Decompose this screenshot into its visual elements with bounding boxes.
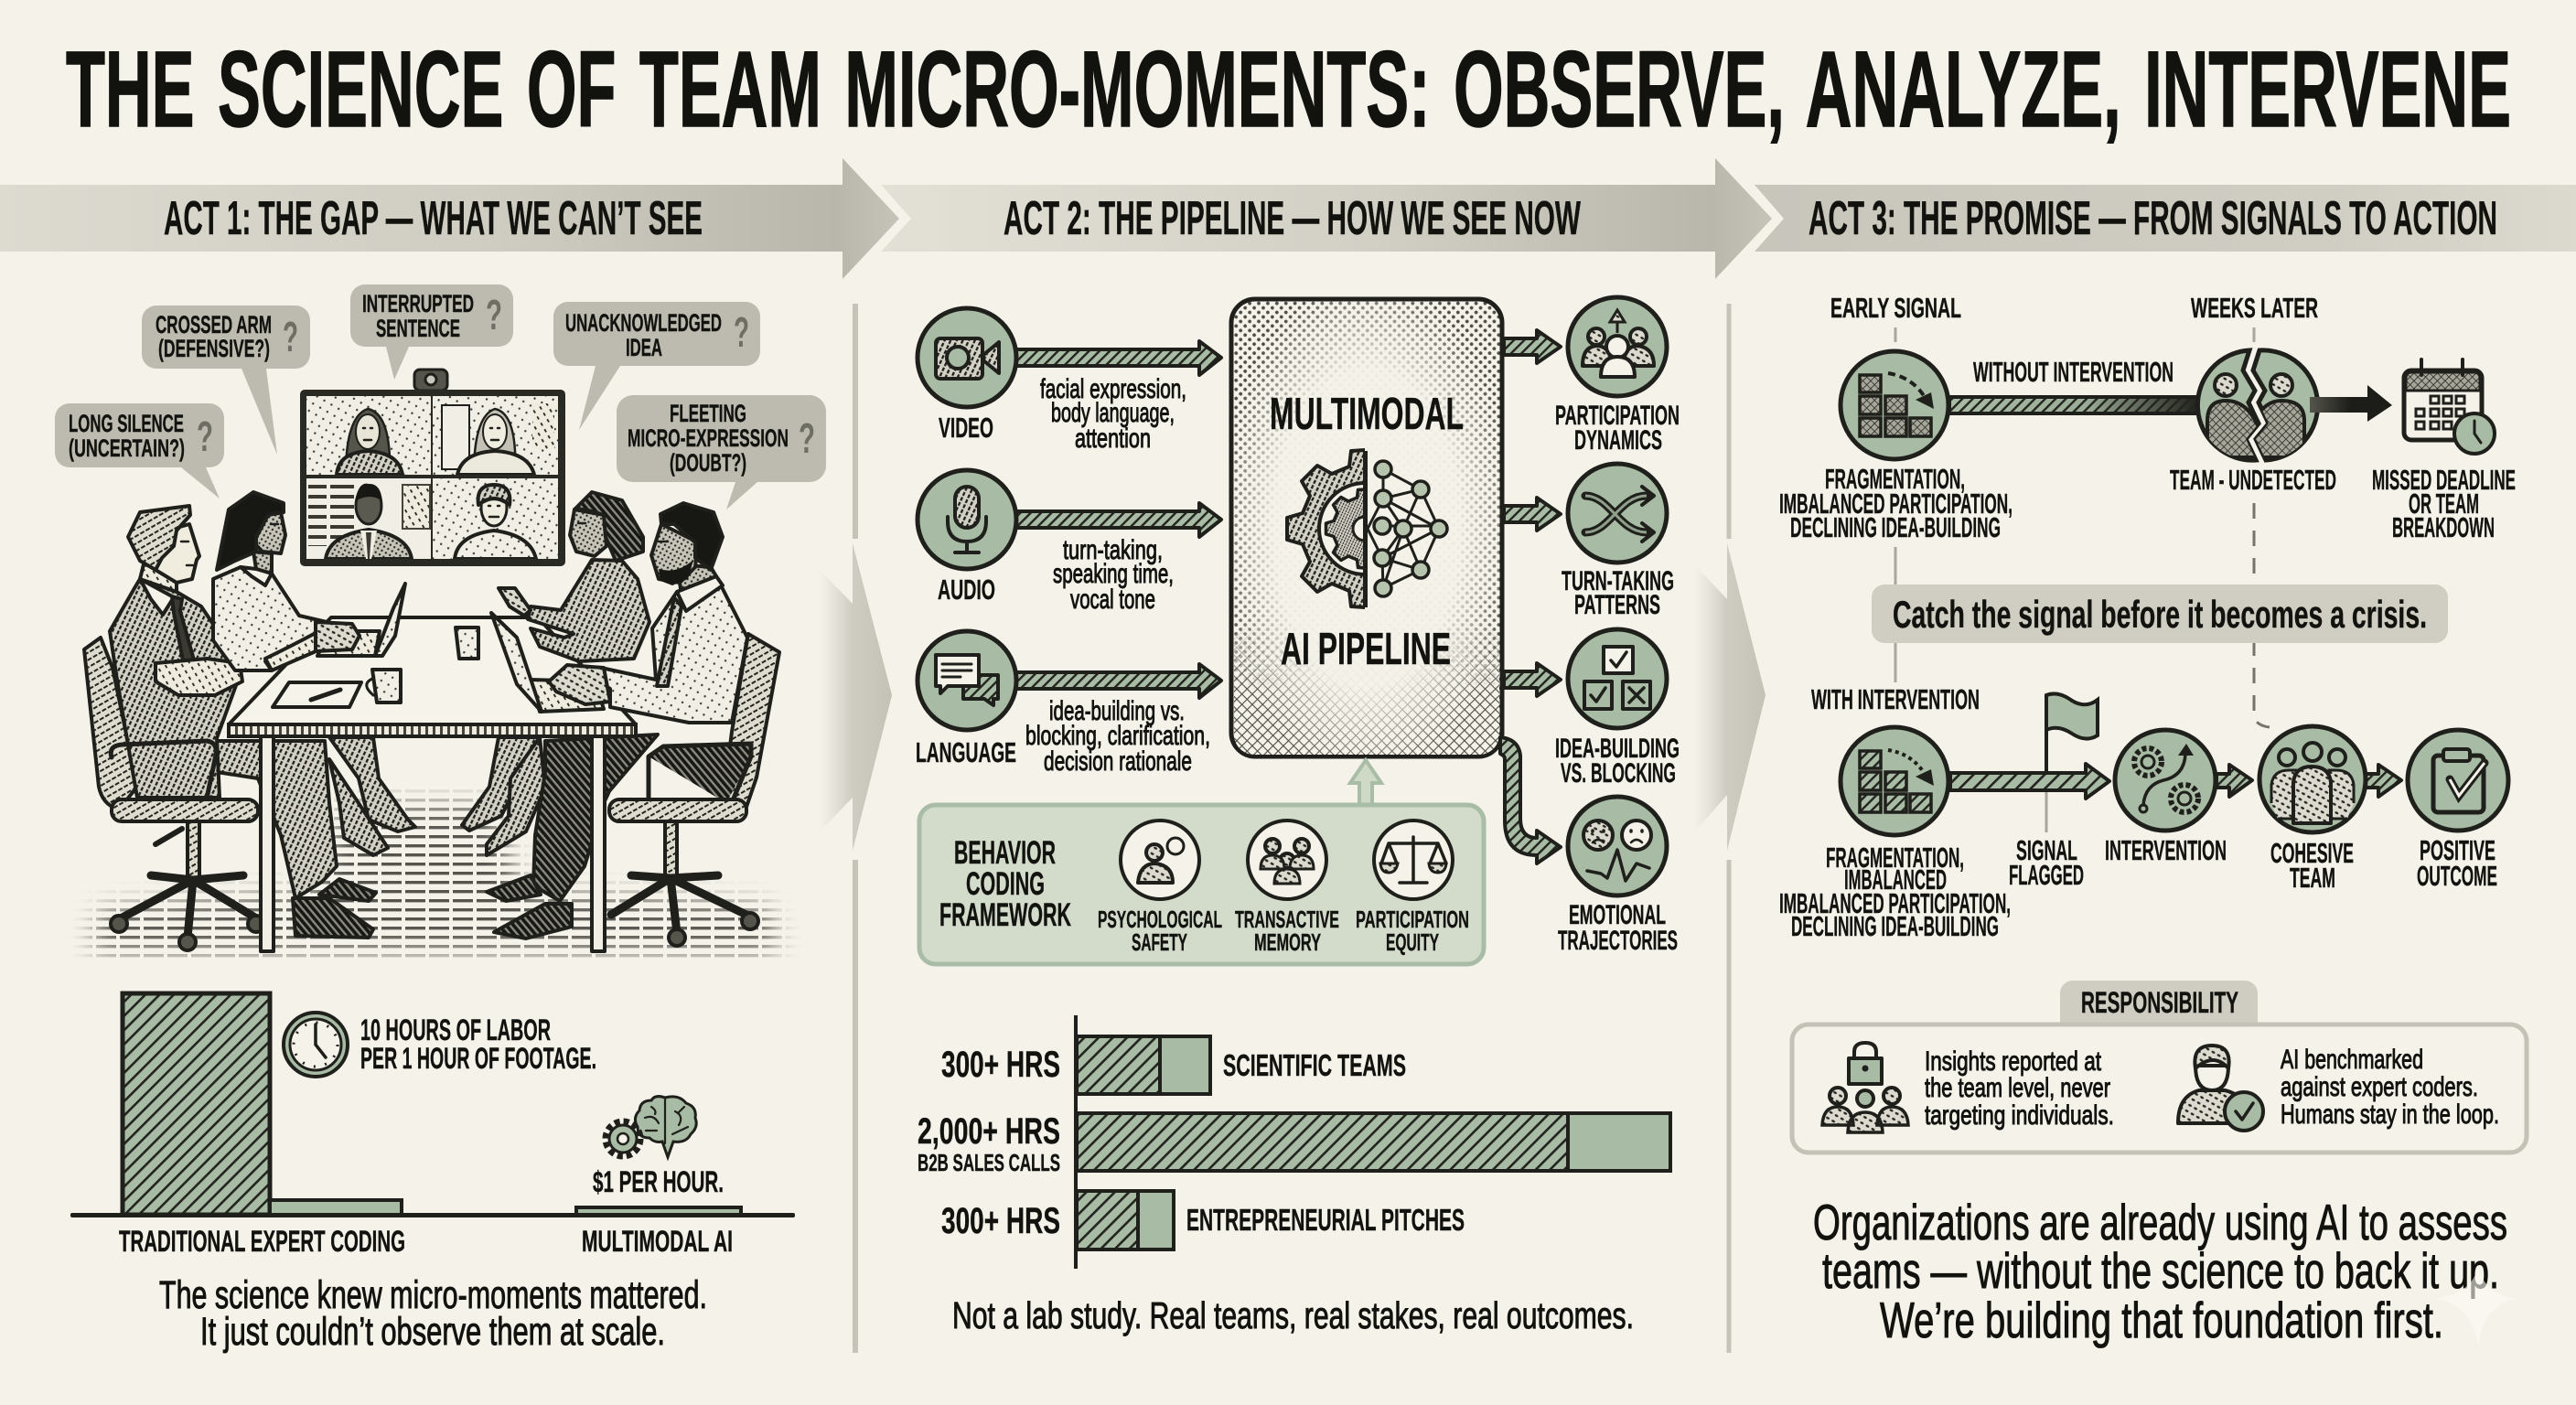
header arrow: act 1 — [0, 158, 899, 279]
speech bubble: unacknowledged idea — [553, 302, 760, 430]
multimodal AI pipeline box: AI PIPELINE — [1281, 625, 1451, 674]
icon: fragmentation blocks — [1841, 351, 1948, 459]
timeline: with intervention — [1779, 683, 2508, 942]
conference table — [229, 584, 636, 951]
floor shading — [55, 787, 814, 960]
figure: man with crossed arms — [110, 506, 258, 821]
multimodal AI pipeline box: MULTIMODAL — [1270, 390, 1464, 439]
act 1 caption: The science knew micro-moments mattered. — [159, 1273, 707, 1317]
speech bubble: fleeting micro-expression: FLEETING — [670, 400, 746, 427]
timeline: with intervention: SIGNAL — [2016, 834, 2077, 866]
panel: behavior coding framework: PARTICIPATION — [1356, 906, 1469, 933]
multimodal AI pipeline box — [1231, 299, 1502, 756]
coffee mug: far — [456, 627, 478, 659]
speech bubble: interrupted sentence: ? — [486, 291, 502, 338]
act 1 caption — [159, 1273, 707, 1354]
panel: behavior coding framework: EQUITY — [1386, 928, 1439, 956]
speech bubble: fleeting micro-expression: ? — [799, 414, 815, 462]
figure: man legs, right — [487, 735, 658, 938]
sparkle watermark — [2433, 1266, 2517, 1346]
timeline: without intervention: WEEKS LATER — [2191, 292, 2318, 324]
divider: act 2 and act 3 — [1727, 304, 1731, 1353]
header arrow: act 1: ACT 1: THE GAP — WHAT WE CAN’T SEE — [164, 192, 703, 245]
panel: act 2 the pipeline — [916, 297, 1680, 1336]
dataset bar chart — [918, 1015, 1670, 1269]
panel: act 1 the gap — [55, 284, 826, 1354]
icon: intervention gears — [2115, 730, 2216, 831]
act 1 caption: It just couldn’t observe them at scale. — [200, 1310, 665, 1354]
bar: B2B sales calls: B2B SALES CALLS — [918, 1149, 1060, 1176]
output: participation dynamics: DYNAMICS — [1574, 425, 1662, 456]
icon: positive outcome clipboard — [2408, 730, 2508, 831]
figure: woman typing on laptop — [213, 492, 360, 670]
input: language: decision rationale — [1044, 746, 1192, 777]
icon: gear and neural network — [1287, 450, 1447, 607]
speech bubble: unacknowledged idea: ? — [734, 308, 749, 356]
timeline: with intervention: IMBALANCED PARTICIPATION, — [1779, 887, 2011, 919]
notepad and pen — [273, 682, 361, 707]
remote participant: top right — [442, 403, 554, 475]
cost bar chart — [70, 993, 795, 1258]
transition chevron 2 — [1694, 543, 1766, 851]
arrow: signal to intervention — [1950, 764, 2109, 799]
panel: act 3 the promise — [1779, 292, 2527, 1348]
output: idea-building vs blocking — [1504, 629, 1680, 788]
video call monitor — [300, 370, 565, 566]
remote participant: bottom left — [308, 482, 430, 559]
bar: B2B sales calls — [918, 1111, 1670, 1176]
cost bar chart: 10 HOURS OF LABOR — [360, 1014, 551, 1046]
bar: multimodal AI — [576, 1207, 741, 1215]
cost bar chart: $1 PER HOUR. — [593, 1165, 724, 1198]
icon: checkboxes — [1584, 647, 1650, 709]
panel: behavior coding framework: SAFETY — [1132, 928, 1187, 956]
laptop: right — [491, 613, 604, 712]
input: video — [918, 308, 1221, 454]
input: audio — [918, 470, 1221, 615]
input: language — [916, 631, 1221, 777]
bar: traditional expert coding — [123, 993, 270, 1215]
arrow: breakdown — [2310, 385, 2392, 422]
input: audio: turn-taking, — [1063, 535, 1163, 565]
panel: behavior coding framework: TRANSACTIVE — [1235, 906, 1339, 933]
bar: traditional expert coding small — [270, 1200, 402, 1215]
transition chevron 1 — [819, 543, 892, 851]
speech bubble: crossed arm: CROSSED ARM — [156, 311, 272, 338]
coffee mug: near — [372, 670, 401, 702]
output: participation dynamics — [1504, 297, 1680, 456]
bar: B2B sales calls: 2,000+ HRS — [918, 1111, 1060, 1152]
timeline: with intervention: IMBALANCED — [1844, 863, 1947, 896]
timeline: with intervention: FLAGGED — [2009, 859, 2084, 891]
input: language: idea-building vs. — [1049, 696, 1185, 726]
panel: behavior coding framework: BEHAVIOR — [954, 835, 1056, 871]
speech bubble: crossed arm: (DEFENSIVE?) — [158, 335, 270, 362]
arrow: intervention to team — [2216, 765, 2252, 797]
figure: woman legs, left — [329, 737, 415, 855]
icon: scales of equity — [1374, 820, 1453, 899]
speech bubble: interrupted sentence — [350, 284, 513, 380]
right chair — [611, 634, 779, 946]
icon: group with a leading person — [1583, 310, 1654, 377]
output: emotional trajectories: TRAJECTORIES — [1558, 926, 1678, 956]
icon: transactive memory — [1248, 820, 1326, 899]
panel: responsibility: Humans stay in the loop. — [2281, 1099, 2499, 1130]
output: participation dynamics: PARTICIPATION — [1555, 401, 1680, 431]
speech bubble: crossed arm: ? — [283, 313, 298, 360]
timeline: with intervention: FRAGMENTATION, — [1826, 842, 1964, 874]
header arrow: act 2 — [881, 158, 1772, 279]
timeline: with intervention: COHESIVE — [2270, 837, 2354, 869]
output: turn-taking patterns: PATTERNS — [1574, 590, 1660, 620]
figure: woman legs, right — [462, 737, 545, 855]
timeline: without intervention: FRAGMENTATION, — [1825, 463, 1965, 495]
timeline: without intervention: DECLINING IDEA-BUILDING — [1790, 511, 2001, 543]
output: turn-taking patterns: TURN-TAKING — [1562, 566, 1674, 596]
panel: responsibility: against expert coders. — [2281, 1072, 2478, 1102]
icon: faces and pulse — [1583, 820, 1651, 881]
timeline: without intervention — [1779, 292, 2516, 543]
timeline: with intervention: OUTCOME — [2417, 860, 2497, 892]
icon: wall clock — [284, 1013, 348, 1077]
icon: broken team circle — [2197, 350, 2318, 460]
icon: lock over team — [1822, 1043, 1908, 1132]
panel: responsibility — [1792, 981, 2527, 1153]
timeline: with intervention: TEAM — [2290, 862, 2335, 894]
speech bubble: long silence: LONG SILENCE — [69, 410, 184, 437]
cost bar chart: MULTIMODAL AI — [582, 1225, 733, 1258]
icon: brain and gear — [606, 1097, 696, 1157]
timeline: with intervention: WITH INTERVENTION — [1811, 683, 1980, 715]
speech bubble: long silence — [55, 403, 224, 499]
figure: woman gesturing — [499, 492, 649, 661]
bar: scientific teams: SCIENTIFIC TEAMS — [1223, 1048, 1406, 1082]
input: audio: speaking time, — [1053, 559, 1174, 589]
speech bubble: interrupted sentence: SENTENCE — [376, 315, 460, 342]
output: emotional trajectories — [1500, 737, 1678, 956]
speech bubble: unacknowledged idea: UNACKNOWLEDGED — [565, 309, 722, 337]
input: video: VIDEO — [939, 412, 993, 444]
timeline: with intervention: DECLINING IDEA-BUILDING — [1791, 910, 1999, 942]
input: video: attention — [1075, 424, 1151, 454]
panel: behavior coding framework: PSYCHOLOGICAL — [1098, 906, 1222, 933]
panel: responsibility: RESPONSIBILITY — [2081, 986, 2238, 1019]
output: idea-building vs blocking: IDEA-BUILDING — [1555, 734, 1680, 764]
panel: behavior coding framework: MEMORY — [1254, 928, 1321, 956]
bar: entrepreneurial pitches — [941, 1191, 1465, 1249]
icon: psychological safety — [1121, 820, 1199, 899]
speech bubble: long silence: ? — [197, 413, 213, 460]
header arrow: act 2: ACT 2: THE PIPELINE — HOW WE SEE NOW — [1004, 192, 1582, 245]
left chair — [84, 638, 264, 950]
panel: behavior coding framework — [919, 760, 1484, 964]
arrow: fading into breakdown — [1949, 397, 2198, 413]
input: video: facial expression, — [1040, 374, 1186, 404]
panel: responsibility: targeting individuals. — [1925, 1100, 2114, 1131]
speech bubble: fleeting micro-expression: (DOUBT?) — [670, 449, 746, 477]
icon: fragmentation blocks — [1841, 727, 1948, 835]
bar: entrepreneurial pitches: ENTREPRENEURIAL PITCHES — [1186, 1203, 1465, 1237]
input: language: blocking, clarification, — [1025, 721, 1210, 751]
icon: speech bubbles — [936, 655, 998, 705]
timeline: without intervention: OR TEAM — [2409, 488, 2479, 520]
input: video: body language, — [1051, 398, 1175, 428]
panel: behavior coding framework: FRAMEWORK — [939, 897, 1071, 933]
icon: microphone — [948, 487, 986, 552]
input: audio: AUDIO — [938, 574, 995, 606]
speech bubble: fleeting micro-expression — [617, 395, 826, 509]
icon: signal flag — [2046, 693, 2098, 773]
closing statement — [1813, 1194, 2507, 1348]
cost bar chart: PER 1 HOUR OF FOOTAGE. — [360, 1042, 596, 1075]
remote participant: bottom right — [455, 485, 536, 559]
bar: scientific teams: 300+ HRS — [941, 1045, 1060, 1085]
icon: video camera — [936, 338, 999, 379]
timeline: with intervention: POSITIVE — [2420, 834, 2496, 866]
speech bubble: crossed arm — [142, 306, 310, 455]
arrow: framework into pipeline — [1350, 760, 1381, 805]
icon: crossing arrows — [1585, 487, 1654, 542]
timeline: without intervention: WITHOUT INTERVENTION — [1973, 356, 2174, 388]
timeline: without intervention: TEAM - UNDETECTED — [2170, 464, 2336, 496]
remote participant: top left — [337, 409, 402, 475]
output: idea-building vs blocking: VS. BLOCKING — [1561, 758, 1676, 788]
callout: catch the signal — [1872, 585, 2448, 643]
icon: calendar and clock — [2404, 359, 2495, 454]
output: turn-taking patterns — [1504, 464, 1674, 620]
bar: scientific teams — [941, 1036, 1406, 1094]
figure: man typing on laptop — [549, 503, 751, 821]
cost bar chart: TRADITIONAL EXPERT CODING — [119, 1225, 405, 1258]
speech bubble: interrupted sentence: INTERRUPTED — [362, 290, 474, 317]
timeline: without intervention: EARLY SIGNAL — [1830, 292, 1961, 324]
icon: cohesive team — [2259, 726, 2366, 832]
guide lines — [1895, 327, 2270, 832]
timeline: with intervention: INTERVENTION — [2105, 834, 2227, 866]
speech bubble: unacknowledged idea: IDEA — [626, 334, 662, 361]
panel: behavior coding framework: CODING — [966, 866, 1045, 902]
speech bubble: fleeting micro-expression: MICRO-EXPRESSION — [628, 424, 789, 452]
panel: responsibility: the team level, never — [1925, 1073, 2110, 1103]
timeline: without intervention: IMBALANCED PARTICIPATION, — [1779, 488, 2012, 520]
bar: entrepreneurial pitches: 300+ HRS — [941, 1201, 1060, 1241]
figure: man legs, left — [217, 741, 376, 938]
input: language: LANGUAGE — [916, 736, 1016, 768]
divider: act 1 and act 2 — [853, 304, 858, 1353]
arrow: team to outcome — [2366, 765, 2401, 797]
icon: person with check — [2178, 1046, 2263, 1131]
speech bubble: long silence: (UNCERTAIN?) — [69, 434, 185, 462]
panel: responsibility: Insights reported at — [1925, 1046, 2101, 1077]
output: emotional trajectories: EMOTIONAL — [1569, 900, 1666, 930]
laptop: left — [317, 631, 380, 656]
panel: responsibility: AI benchmarked — [2281, 1045, 2423, 1075]
input: audio: vocal tone — [1070, 585, 1155, 615]
act 2 caption: Not a lab study. Real teams, real stakes, real outcomes. — [952, 1294, 1634, 1336]
